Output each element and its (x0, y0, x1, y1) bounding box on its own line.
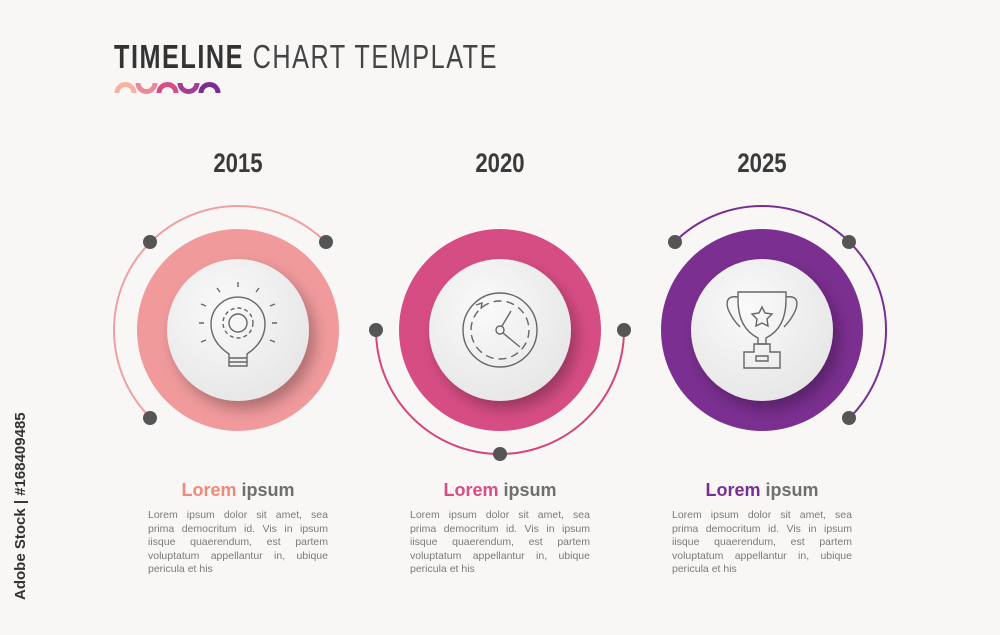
text: Lorem ipsum (181, 480, 295, 500)
step 3 (661, 206, 886, 431)
text: voluptatum appellantur in, ubique (148, 550, 328, 562)
text: prima democritum id. Vis in ipsum (672, 523, 852, 535)
text: iisque quaerendum, est partem (148, 536, 328, 548)
text: prima democritum id. Vis in ipsum (410, 523, 590, 535)
year 2025: 2025 (737, 148, 787, 178)
text: voluptatum appellantur in, ubique (410, 550, 590, 562)
text: voluptatum appellantur in, ubique (672, 550, 852, 562)
icon: trophy (727, 292, 797, 368)
text: prima democritum id. Vis in ipsum (148, 523, 328, 535)
title: TIMELINE CHART TEMPLATE (114, 38, 498, 75)
icon: clock (463, 293, 537, 367)
step 1 (114, 206, 339, 431)
text: Lorem ipsum dolor sit amet, sea (148, 509, 328, 521)
step 2 (369, 229, 631, 461)
watermark vertical: Adobe Stock | #168409485 (12, 412, 29, 600)
text: iisque quaerendum, est partem (410, 536, 590, 548)
text: Lorem ipsum dolor sit amet, sea (410, 509, 590, 521)
text block 2 (410, 480, 590, 575)
title decoration waves (114, 82, 220, 94)
text: iisque quaerendum, est partem (672, 536, 852, 548)
year 2015: 2015 (213, 148, 263, 178)
text block 3 (672, 480, 852, 575)
text: pericula et his (410, 563, 475, 575)
text: pericula et his (148, 563, 213, 575)
text: Lorem ipsum (705, 480, 819, 500)
text: pericula et his (672, 563, 737, 575)
text block 1 (148, 480, 328, 575)
text: Lorem ipsum (443, 480, 557, 500)
icon: bulb with gear (199, 282, 277, 366)
year 2020: 2020 (475, 148, 525, 178)
text: Lorem ipsum dolor sit amet, sea (672, 509, 852, 521)
